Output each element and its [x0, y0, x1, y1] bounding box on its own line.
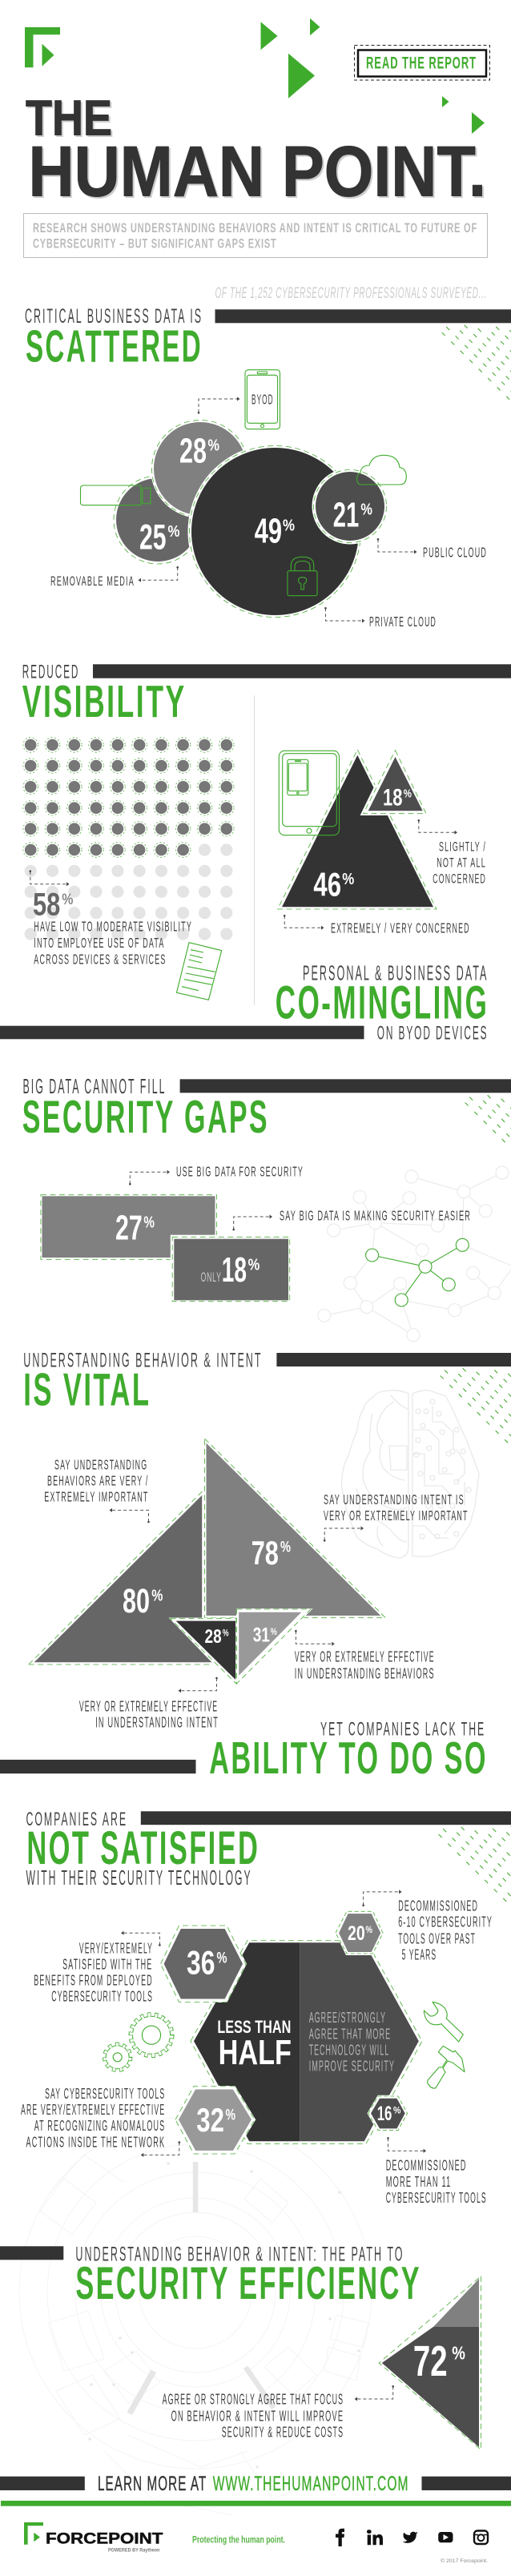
- icon: network graph: [318, 1166, 511, 1342]
- triangle: 18 percent: %: [404, 788, 412, 801]
- heading: not satisfied: NOT SATISFIED: [26, 1822, 260, 1874]
- label: 20 percent: 5 YEARS: [402, 1946, 437, 1962]
- decorative green triangles: [261, 18, 485, 134]
- arrow: public cloud: [377, 538, 416, 554]
- hexagon: less than half: AGREE THAT MORE: [309, 2026, 391, 2042]
- label: 16 percent: MORE THAN 11: [386, 2174, 452, 2190]
- box: 27 percent: %: [143, 1214, 155, 1231]
- hexagon: less than half: IMPROVE SECURITY: [309, 2058, 395, 2074]
- bubble: private cloud 49%: [187, 444, 362, 618]
- heading: scattered: [25, 305, 511, 372]
- call to action: learn more: LEARN MORE AT: [98, 2473, 207, 2495]
- icon: byod phone: [245, 370, 280, 429]
- icon: usb drive: [80, 485, 151, 505]
- icon: padlock: [288, 557, 317, 596]
- title: [26, 90, 486, 211]
- arrow: behaviors important: [109, 1508, 150, 1523]
- heading: not satisfied: WITH THEIR SECURITY TECHNOLOGY: [26, 1867, 251, 1890]
- stripes decoration: [442, 324, 511, 400]
- bubble: private cloud 49%: %: [283, 517, 295, 535]
- heading: is vital: IS VITAL: [23, 1365, 151, 1416]
- bubble: byod 28%: %: [208, 437, 219, 455]
- bubble: public cloud 21%: [312, 468, 388, 545]
- label: 36 percent: SATISFIED WITH THE: [62, 1957, 152, 1973]
- heading: security gaps: SECURITY GAPS: [22, 1092, 269, 1143]
- icon: byod phone: BYOD: [251, 391, 274, 407]
- box: 18 percent: ONLY: [201, 1270, 222, 1285]
- dot matrix: 58 of 100: [23, 738, 234, 940]
- green divider: [1, 2501, 511, 2506]
- arrow: 32 percent: [141, 2141, 180, 2157]
- triangle: 18 percent: 18: [383, 785, 402, 811]
- bubble: removable media 25%: %: [168, 523, 180, 541]
- label: private cloud: PRIVATE CLOUD: [369, 614, 437, 630]
- label: 32 percent: ACTIONS INSIDE THE NETWORK: [26, 2134, 165, 2150]
- box: 27 percent: 27: [115, 1208, 143, 1247]
- heading: visibility: VISIBILITY: [22, 676, 187, 727]
- triangle: 78 percent: [205, 1439, 385, 1618]
- stat: 58 percent: 58: [33, 888, 60, 923]
- bubble: removable media 25%: [114, 476, 202, 564]
- arrow: slightly concerned: [418, 819, 457, 835]
- triangle: 80 percent: %: [151, 1588, 163, 1605]
- icon: youtube: [438, 2532, 453, 2542]
- arrow: private cloud: [324, 607, 365, 623]
- triangle: 31 percent: %: [271, 1626, 277, 1637]
- background: faint radial circuit: [19, 2116, 372, 2515]
- heading: ability to do so: [0, 1718, 488, 1784]
- arrow: 16 percent: [387, 2137, 426, 2153]
- bubble: byod 28%: [151, 419, 250, 518]
- bubble: private cloud 49%: 49: [255, 512, 282, 551]
- stat: 58 percent: INTO EMPLOYEE USE OF DATA: [34, 935, 164, 951]
- label: removable media: REMOVABLE MEDIA: [50, 574, 135, 589]
- stat: 58 percent: ACROSS DEVICES & SERVICES: [34, 951, 166, 967]
- tagline: Protecting the human point.: [192, 2536, 285, 2546]
- icon: instagram: [474, 2531, 488, 2544]
- arrow: 20 percent: [362, 1890, 402, 1906]
- heading: is vital: [23, 1350, 511, 1416]
- stat: 58 percent: %: [62, 892, 74, 908]
- social icons: [336, 2529, 488, 2546]
- triangle: 18 percent: [364, 751, 426, 814]
- arrow: extremely concerned: [284, 915, 324, 930]
- hexagon chart: satisfaction: CYBERSECURITY TOOLS: [51, 1989, 153, 2005]
- arrow: effective intent: [178, 1677, 218, 1693]
- heading: scattered: SCATTERED: [26, 322, 203, 372]
- heading: co-mingling: [0, 962, 489, 1044]
- hexagon: 20 percent: [336, 1911, 383, 1954]
- heading: security gaps: [22, 1076, 511, 1143]
- icon: cloud: [357, 455, 406, 485]
- arrow: effective behaviors: [295, 1630, 335, 1646]
- hexagon: 32 percent: %: [226, 2107, 235, 2123]
- hexagon: 36 percent: [161, 1926, 246, 2002]
- hexagon chart: satisfaction: ARE VERY/EXTREMELY EFFECTIVE: [21, 2102, 165, 2118]
- hexagon: 16 percent: 16: [377, 2103, 392, 2125]
- arrow: use big data: [129, 1170, 170, 1185]
- heading: not satisfied: [26, 1809, 511, 1890]
- heading: visibility: [22, 662, 511, 727]
- hexagon: 16 percent: %: [393, 2104, 401, 2115]
- triangle: 28 percent: %: [223, 1628, 229, 1639]
- heading: visibility: REDUCED: [22, 662, 79, 683]
- label: behaviors important: EXTREMELY IMPORTANT: [44, 1488, 148, 1504]
- icon: facebook: [336, 2529, 344, 2546]
- triangle: 78 percent: 78: [251, 1534, 279, 1572]
- footer logo: [24, 2522, 163, 2554]
- box: 27 percent: [41, 1195, 217, 1259]
- label: 32 percent: [21, 2086, 165, 2150]
- triangle chart: concern: 46: [313, 865, 341, 903]
- triangle: 72 percent: [379, 2276, 481, 2449]
- triangle: 28 percent: [169, 1618, 236, 1684]
- bubble: public cloud 21%: 21: [333, 495, 359, 534]
- stat: 58 percent: [33, 888, 192, 967]
- title: THE: [26, 90, 112, 146]
- label: behaviors important: SAY UNDERSTANDING: [54, 1456, 147, 1472]
- arrow: 58 percent: [29, 870, 69, 886]
- label: 72 percent: ON BEHAVIOR & INTENT WILL IMPROVE: [171, 2408, 344, 2424]
- bubble: removable media 25%: 25: [139, 518, 167, 557]
- hexagon: 36 percent: %: [216, 1950, 227, 1967]
- triangle: 80 percent: [29, 1490, 213, 1664]
- bubble: byod 28%: 28: [179, 432, 207, 470]
- arrow: making security easier: [232, 1214, 272, 1230]
- bubble: public cloud 21%: %: [360, 501, 372, 518]
- hexagon: 20 percent: %: [365, 1924, 372, 1935]
- footer logo: POWERED BY Raytheon: [108, 2549, 160, 2554]
- heading: scattered: CRITICAL BUSINESS DATA IS: [25, 305, 203, 328]
- triangle: 78 percent: %: [280, 1540, 291, 1556]
- heading: is vital: UNDERSTANDING BEHAVIOR & INTENT: [23, 1350, 263, 1372]
- box: 18 percent: [171, 1235, 292, 1304]
- read the report button: [354, 45, 490, 80]
- label: use big data: USE BIG DATA FOR SECURITY: [176, 1163, 304, 1179]
- hexagon chart: satisfaction: AT RECOGNIZING ANOMALOUS: [34, 2118, 165, 2134]
- stat: 58 percent: HAVE LOW TO MODERATE VISIBILITY: [34, 918, 192, 934]
- hexagon: 16 percent: [368, 2096, 408, 2130]
- hexagon chart: satisfaction: BENEFITS FROM DEPLOYED: [34, 1973, 153, 1989]
- hexagon: less than half: HALF: [219, 2033, 292, 2072]
- hexagon: 20 percent: 20: [348, 1922, 365, 1945]
- hexagon chart: satisfaction: [21, 1890, 493, 2206]
- triangle chart: behavior and intent: VERY OR EXTREMELY EFFECTIVE: [79, 1698, 218, 1714]
- triangle: 72 percent: 72: [413, 2337, 448, 2385]
- triangle: 28 percent: 28: [205, 1626, 222, 1648]
- box: 18 percent: 18: [222, 1250, 247, 1290]
- triangle chart: concern: [278, 743, 486, 936]
- icon: tablet and phone: [279, 751, 340, 835]
- logo mark: [25, 27, 60, 67]
- hexagon chart: satisfaction: SAY CYBERSECURITY TOOLS: [45, 2086, 165, 2102]
- heading: not satisfied: COMPANIES ARE: [26, 1809, 127, 1830]
- triangle: 80 percent: 80: [123, 1583, 150, 1620]
- icon: gears: [104, 2015, 171, 2070]
- arrow: byod: [198, 397, 240, 414]
- arrow: 36 percent: [121, 1931, 161, 1946]
- hexagon: less than half: TECHNOLOGY WILL: [309, 2042, 389, 2058]
- hexagon: less than half: AGREE/STRONGLY: [309, 2010, 386, 2026]
- copyright: © 2017 Forcepoint.: [441, 2558, 488, 2564]
- hexagon: 32 percent: 32: [196, 2101, 224, 2139]
- intro text box: CYBERSECURITY – BUT SIGNIFICANT GAPS EXIST: [33, 236, 277, 251]
- label: slightly concerned: [433, 839, 486, 886]
- hexagon: less than half: [191, 1940, 422, 2143]
- bubble chart: data locations: [50, 370, 487, 630]
- triangle chart: concern: %: [342, 871, 354, 888]
- stripes decoration: [441, 1368, 511, 1443]
- box: 18 percent: %: [248, 1257, 260, 1274]
- label: 72 percent: [163, 2392, 344, 2440]
- call to action: learn more: [0, 2473, 511, 2495]
- label: 20 percent: [398, 1898, 493, 1962]
- label: behaviors important: BEHAVIORS ARE VERY /: [47, 1472, 149, 1488]
- hexagon: less than half: LESS THAN: [217, 2017, 291, 2037]
- icon: document: [176, 943, 222, 1000]
- label: effective intent: IN UNDERSTANDING INTENT: [95, 1714, 219, 1730]
- hexagon chart: satisfaction: VERY/EXTREMELY: [79, 1941, 153, 1957]
- divider: [253, 695, 255, 1005]
- icon: brain: [342, 1391, 479, 1558]
- triangle: 46 percent: [278, 743, 437, 909]
- intro text box: [24, 213, 487, 258]
- stripes decoration: [465, 1095, 511, 1169]
- icon: linkedin: [367, 2530, 383, 2545]
- triangle: 31 percent: [236, 1608, 313, 1684]
- triangle chart: behavior and intent: [29, 1439, 469, 1730]
- label: behaviors important: [44, 1456, 148, 1504]
- icon: hammer: [428, 2046, 465, 2088]
- footer logo: FORCEPOINT: [46, 2530, 163, 2548]
- arrow: 72 percent: [355, 2385, 394, 2401]
- label: 36 percent: [34, 1941, 153, 2005]
- label: 16 percent: [386, 2157, 487, 2206]
- text: SECURITY & REDUCE COSTS: [222, 2424, 344, 2440]
- label: intent important: [324, 1491, 469, 1523]
- label: effective intent: [79, 1698, 219, 1730]
- stripes decoration: [439, 1826, 511, 1902]
- arrow: intent important: [324, 1527, 364, 1542]
- heading: security gaps: BIG DATA CANNOT FILL: [22, 1076, 167, 1098]
- icon: twitter: [403, 2532, 417, 2543]
- triangle: 31 percent: 31: [253, 1624, 270, 1647]
- hexagon: 32 percent: [175, 2086, 255, 2154]
- icon: wrench: [424, 2002, 463, 2042]
- hexagon: 36 percent: 36: [187, 1943, 215, 1982]
- label: effective behaviors: [295, 1648, 435, 1682]
- triangle: 72 percent: %: [452, 2343, 465, 2364]
- arrow: removable media: [138, 566, 179, 582]
- section: security efficiency heading: [0, 2243, 421, 2309]
